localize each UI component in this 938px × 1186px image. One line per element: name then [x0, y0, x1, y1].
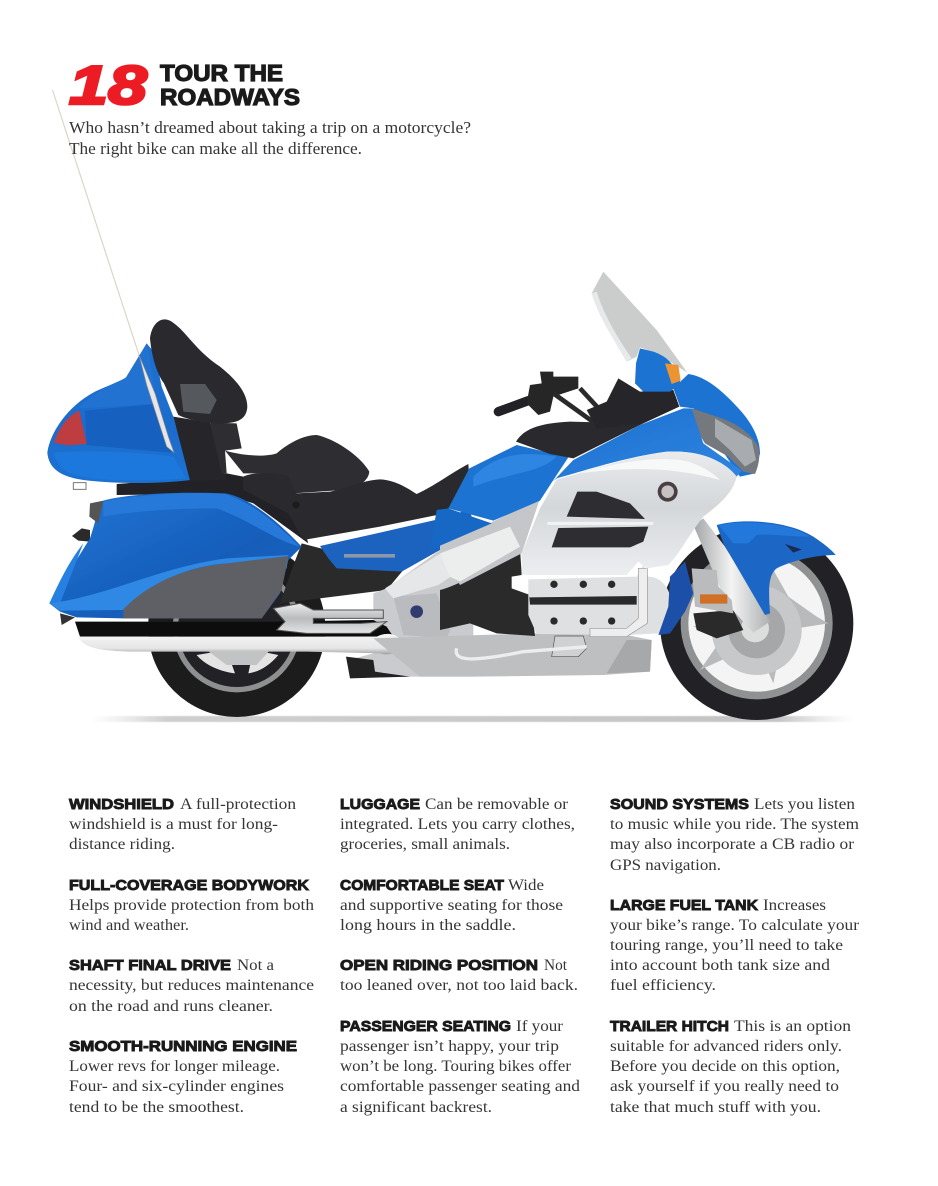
item: luggage: groceries, small animals.: [340, 836, 510, 853]
item: large fuel tank: fuel efficiency.: [610, 977, 716, 994]
item: comfortable seat: and supportive seating for those: [340, 897, 563, 914]
item: sound systems: may also incorporate a CB radio or: [610, 836, 855, 853]
windshield: [592, 272, 687, 373]
item: smooth-running engine: SMOOTH-RUNNING ENGINE: [69, 1038, 297, 1055]
item: smooth-running engine: Four- and six-cylinder engines: [69, 1078, 284, 1095]
black underside panel: [280, 543, 403, 603]
trunk top box: [47, 343, 191, 489]
item: trailer hitch: [610, 1018, 851, 1116]
item: passenger seating: comfortable passenger seating and: [340, 1078, 580, 1095]
item: comfortable seat: long hours in the saddle.: [340, 917, 516, 934]
headlight: [692, 408, 759, 474]
silver fairing: [522, 452, 737, 575]
column 1: [69, 796, 314, 1116]
dark console: [516, 422, 643, 458]
antenna: [52, 90, 140, 358]
badge: [658, 482, 678, 502]
item: smooth-running engine: tend to be the smoothest.: [69, 1099, 244, 1116]
item: sound systems: [610, 796, 859, 874]
lower front fairing shroud: [658, 562, 693, 635]
item: large fuel tank: LARGE FUEL TANK: [610, 897, 758, 914]
mirror: [635, 348, 681, 392]
heading line 1 and 2: TOUR THE: [160, 60, 283, 86]
rear half of bike: [47, 319, 473, 717]
item: shaft final drive: Not a: [237, 957, 274, 974]
item: sound systems: Lets you listen: [754, 796, 855, 813]
item: shaft final drive: SHAFT FINAL DRIVE: [69, 957, 231, 974]
backrest: [150, 319, 247, 481]
title: 18 Tour the Roadways: [69, 54, 300, 116]
front fender: [717, 521, 836, 615]
item: windshield: A full-protection: [180, 796, 296, 813]
motorcycle illustration: [47, 90, 855, 722]
item: trailer hitch: take that much stuff with you.: [610, 1099, 821, 1116]
item: large fuel tank: into account both tank size and: [610, 957, 830, 974]
exhaust: [75, 603, 402, 654]
item: trailer hitch: This is an option: [734, 1018, 851, 1035]
item: luggage: Can be removable or: [425, 796, 569, 813]
item: shaft final drive: necessity, but reduces maintenance: [69, 977, 314, 994]
item: sound systems: SOUND SYSTEMS: [610, 796, 749, 813]
ground shadow: [90, 716, 855, 722]
front half of bike: [373, 272, 853, 720]
item: luggage: [340, 796, 575, 853]
heading line 1 and 2: [160, 60, 300, 110]
front wheel: [660, 527, 853, 720]
item: shaft final drive: on the road and runs cleaner.: [69, 998, 273, 1015]
footpeg: [72, 528, 90, 542]
chrome antenna mount: [139, 355, 174, 453]
item: passenger seating: a significant backrest.: [340, 1099, 492, 1116]
intro text: The right bike can make all the difference.: [69, 139, 362, 158]
item: trailer hitch: suitable for advanced riders only.: [610, 1038, 842, 1055]
item: large fuel tank: Increases: [763, 897, 826, 914]
item: full-coverage bodywork: wind and weather.: [69, 917, 189, 934]
item: large fuel tank: [610, 897, 860, 994]
black bracket under engine: [346, 657, 410, 678]
heading line 1 and 2: ROADWAYS: [160, 84, 300, 110]
item: passenger seating: won’t be long. Touring bikes offer: [340, 1058, 572, 1075]
item: sound systems: GPS navigation.: [610, 857, 721, 874]
lower silver engine: [373, 633, 652, 677]
upper fairing: [673, 374, 760, 477]
black engine block: [440, 548, 535, 636]
orange side reflector: [700, 594, 727, 604]
item: smooth-running engine: [69, 1038, 297, 1116]
item: passenger seating: If your: [516, 1018, 564, 1035]
item: windshield: WINDSHIELD: [69, 796, 174, 813]
handlebar and controls: [498, 372, 607, 432]
item: trailer hitch: Before you decide on this option,: [610, 1058, 840, 1075]
intro text: Who hasn’t dreamed about taking a trip on a motorcycle?: [69, 118, 471, 137]
blue fairing band: [553, 408, 742, 482]
intro text: [69, 118, 471, 158]
item: trailer hitch: ask yourself if you really need to: [610, 1078, 839, 1095]
item: open riding position: OPEN RIDING POSITION: [340, 957, 538, 974]
number 18: 18: [69, 54, 148, 116]
rear wheel: [148, 540, 325, 717]
item: full-coverage bodywork: FULL-COVERAGE BODYWORK: [69, 877, 309, 894]
radiator vents: [547, 492, 653, 547]
item: large fuel tank: touring range, you’ll need to take: [610, 937, 843, 954]
silver frame rear: [348, 533, 473, 677]
fork: [693, 518, 770, 633]
item: sound systems: to music while you ride. The system: [610, 816, 859, 833]
column 2: [340, 796, 580, 1116]
item: passenger seating: PASSENGER SEATING: [340, 1018, 511, 1035]
item: windshield: windshield is a must for long-: [69, 816, 278, 833]
saddlebag: [49, 493, 302, 625]
item: comfortable seat: Wide: [508, 877, 544, 894]
blue tank: [448, 445, 568, 521]
item: luggage: integrated. Lets you carry clothes,: [340, 816, 575, 833]
item: large fuel tank: your bike’s range. To calculate your: [610, 917, 860, 934]
item: windshield: distance riding.: [69, 836, 175, 853]
silver frame: [440, 498, 540, 585]
item: passenger seating: passenger isn’t happy, your trip: [340, 1038, 559, 1055]
item: open riding position: Not: [544, 957, 568, 974]
chrome cylinder head: [528, 565, 672, 637]
item: windshield: [69, 796, 296, 853]
item: open riding position: [340, 957, 578, 994]
cockpit panel: [587, 378, 679, 428]
item: full-coverage bodywork: Helps provide protection from both: [69, 897, 314, 914]
side cover: [320, 508, 473, 572]
pillion seat and rider seat: [225, 435, 469, 540]
item: smooth-running engine: Lower revs for longer mileage.: [69, 1058, 280, 1075]
item: luggage: LUGGAGE: [340, 796, 420, 813]
column 3: [610, 796, 860, 1116]
item: comfortable seat: COMFORTABLE SEAT: [340, 877, 504, 894]
item: shaft final drive: [69, 957, 314, 1015]
dark mass between trunk and seat: [117, 473, 308, 543]
item: open riding position: too leaned over, not too laid back.: [340, 977, 578, 994]
item: full-coverage bodywork: [69, 877, 314, 934]
item: passenger seating: [340, 1018, 580, 1116]
item: comfortable seat: [340, 877, 563, 934]
item: trailer hitch: TRAILER HITCH: [610, 1018, 729, 1035]
